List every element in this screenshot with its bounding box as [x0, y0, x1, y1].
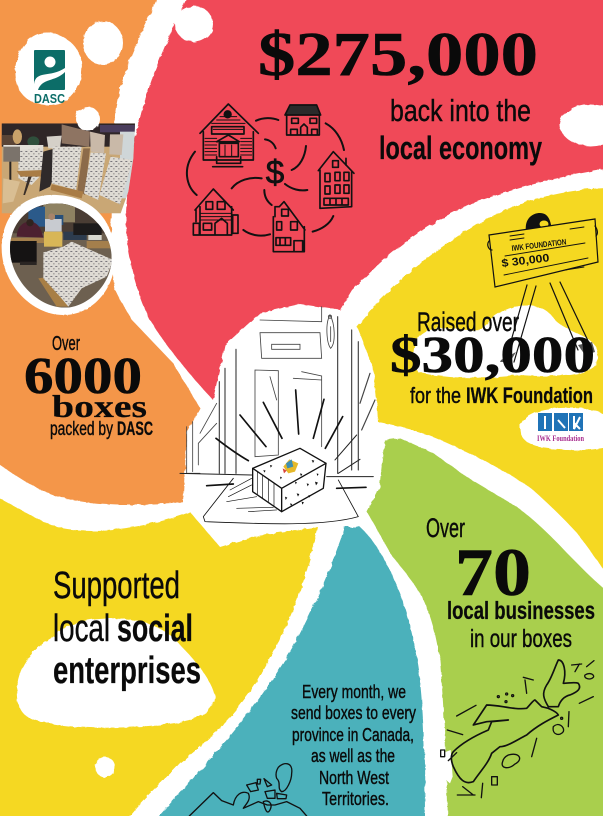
text: every month: Every month, we	[302, 682, 406, 702]
panel: red	[126, 0, 603, 400]
text: over 6000 boxes packed by DASC: packed by	[50, 419, 113, 440]
panel: orange	[0, 0, 200, 505]
white blob: south coast	[437, 750, 453, 783]
blob: small orange	[76, 107, 100, 131]
IWK Foundation logo	[537, 413, 584, 443]
blob: behind enterprises	[17, 618, 215, 728]
blob: upper orange	[83, 21, 123, 65]
text: supported local social enterprises: social	[117, 608, 193, 650]
illustration: person holding giant cheque	[488, 213, 598, 362]
IWK Foundation logo: IWK Foundation	[537, 434, 584, 443]
text: over 70 local businesses: in our boxes	[470, 625, 572, 653]
blob: behind IWK logo	[520, 408, 603, 450]
text: every month: Territories.	[322, 789, 389, 809]
text: over 70 local businesses	[426, 513, 595, 653]
text: supported local social enterprises: Supported	[53, 565, 180, 607]
icon: dollar sign: $	[266, 154, 284, 191]
Cape Breton outline	[544, 660, 580, 707]
burst lines	[207, 390, 366, 488]
text: raised over $30,000: $30,000	[390, 327, 595, 384]
text: supported local social enterprises: enterprises	[53, 650, 201, 692]
text: every month: as well as the	[311, 746, 395, 766]
blob: right edge of red panel	[560, 104, 603, 146]
text: over 70 local businesses: 70	[455, 534, 531, 610]
icon: church-like house	[200, 104, 258, 167]
DASC logo	[34, 50, 66, 106]
heading: $275,000: $275,000	[258, 21, 538, 89]
text: every month	[291, 682, 416, 809]
icon: tall house	[318, 152, 354, 208]
panel: yellow left	[0, 494, 318, 816]
panel: green	[367, 438, 603, 816]
text: raised over $30,000: for the	[410, 383, 461, 408]
icon: left house	[193, 189, 238, 235]
gift box	[227, 448, 326, 512]
text: every month: send boxes to every	[291, 703, 416, 723]
Nova Scotia outline	[451, 700, 558, 783]
panel: yellow right	[357, 188, 603, 582]
photo: warehouse boxes	[0, 122, 137, 215]
text: over 70 local businesses: Over	[426, 513, 465, 543]
blob: small yellow	[95, 757, 115, 777]
blob: behind DASC logo	[15, 33, 81, 105]
cheque	[489, 219, 598, 287]
icon: small house	[285, 105, 321, 135]
DASC logo: DASC	[34, 91, 66, 106]
blob: behind 30,000	[413, 306, 598, 378]
text: over 6000 boxes packed by DASC: boxes	[52, 388, 147, 424]
text: over 6000 boxes packed by DASC: 6000	[24, 348, 142, 405]
panel: teal	[150, 527, 425, 816]
illustration: person holding giant cheque: $ 30,000	[501, 252, 550, 270]
door lines	[180, 307, 375, 477]
text: supported local social enterprises: local	[53, 608, 110, 650]
text: back into the local economy	[379, 93, 542, 166]
text: over 6000 boxes packed by DASC: DASC	[117, 419, 153, 440]
text: raised over $30,000: Raised over	[417, 307, 519, 337]
text: every month: North West	[319, 768, 389, 788]
text: supported local social enterprises	[53, 565, 201, 692]
text: raised over $30,000	[390, 307, 595, 408]
illustration: person holding giant cheque: IWK FOUNDATION	[511, 237, 567, 253]
map: Nova Scotia with product icons	[437, 660, 594, 798]
text: back into the local economy: back into the	[390, 93, 531, 128]
photo: packing team	[2, 195, 117, 315]
text: every month: province in Canada,	[292, 725, 414, 745]
blob: top of red panel	[175, 6, 213, 42]
icon: bottom house	[273, 202, 305, 252]
text: back into the local economy: local economy	[379, 130, 542, 166]
icon: houses circulating money	[187, 104, 354, 252]
map: Canada	[189, 764, 307, 816]
product doodles	[441, 661, 594, 798]
illustration: box on doorstep	[180, 307, 375, 524]
text: over 6000 boxes packed by DASC	[24, 333, 153, 440]
doormat	[203, 478, 358, 524]
text: over 6000 boxes packed by DASC: Over	[52, 333, 80, 355]
icon: arcs between houses	[187, 118, 344, 236]
